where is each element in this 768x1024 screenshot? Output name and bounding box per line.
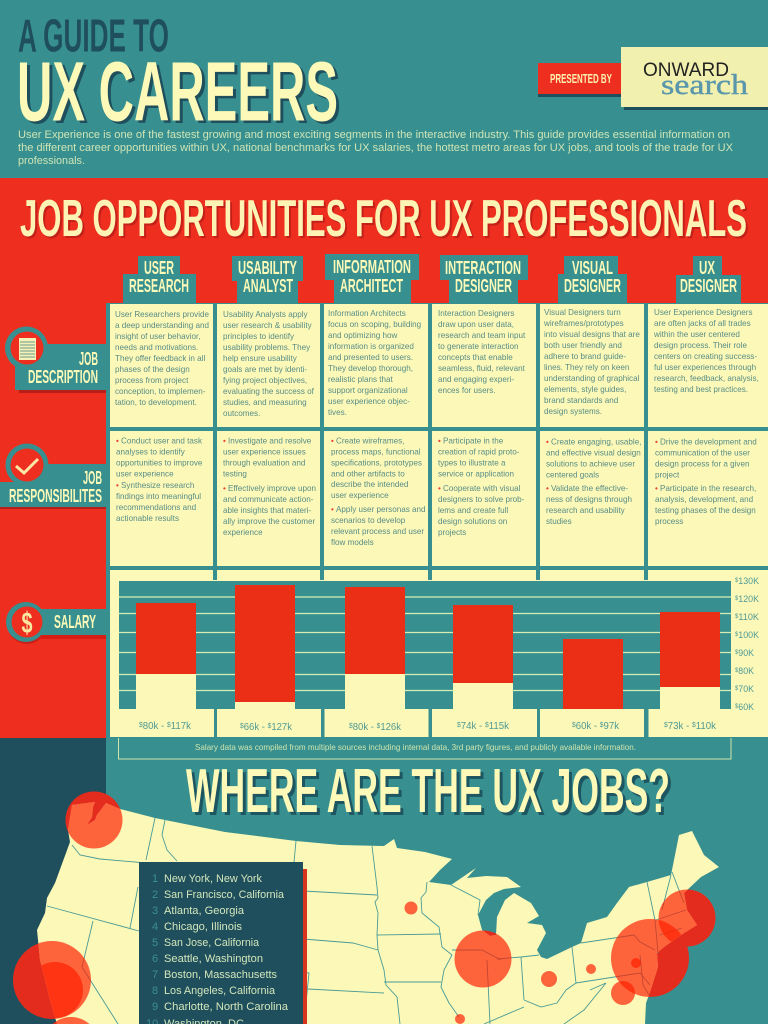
salary range cells: 115k	[489, 721, 510, 732]
column header: information architect: ARCHITECT	[340, 276, 403, 296]
description text: visual designer: brand standards and	[544, 396, 618, 405]
description text: user research: a deep understanding and	[115, 321, 209, 330]
responsibilities text: information architect: user experience	[331, 491, 389, 500]
description text: usability analyst: goals are met by identi-	[223, 365, 307, 374]
responsibilities text: usability analyst: Investigate and resolve	[228, 436, 312, 446]
responsibilities text: usability analyst: testing	[223, 470, 247, 478]
metro circles over land	[38, 802, 697, 1024]
salary range cells: $	[664, 722, 668, 729]
presented by ribbon	[538, 63, 628, 97]
job description row cells	[110, 304, 768, 427]
intro paragraph	[18, 129, 734, 167]
top metro areas list: Seattle, Washington	[164, 953, 263, 965]
salary axis labels: $	[735, 686, 739, 692]
responsibilities text: user research: findings into meaningful	[116, 492, 201, 501]
salary axis labels: 60K	[738, 702, 754, 712]
responsibilities text: user research: user experience	[116, 470, 174, 478]
responsibilities text: visual designer: Validate the effective-	[551, 484, 628, 493]
description text: information architect: realistic plans that	[328, 375, 394, 384]
salary axis labels: 120K	[738, 594, 759, 604]
description text: usability analyst: user research & usability	[223, 321, 313, 330]
description text: visual designer: design systems.	[544, 407, 602, 416]
icon: dollar sign: $	[22, 607, 33, 640]
responsibilities text: ux designer: testing phases of the design	[655, 506, 756, 515]
description text: visual designer: wireframes/prototypes	[543, 319, 624, 328]
description text: ux designer: are often jacks of all trades	[654, 319, 751, 328]
responsibilities text: usability analyst: through evaluation and	[223, 458, 305, 468]
responsibilities text: information architect: scenarios to develop	[331, 516, 406, 525]
responsibilities text: interaction designer: •	[438, 436, 441, 446]
responsibilities text: information architect: and other artifacts to	[331, 470, 405, 478]
top metro areas list: 1	[152, 873, 158, 885]
title line: ux careers: UX CAREERS	[20, 47, 341, 141]
description text: user research: phases of the design	[115, 365, 190, 374]
salary axis labels: 110K	[738, 612, 759, 622]
responsibilities text: usability analyst: •	[223, 436, 226, 446]
presented by ribbon: PRESENTED BY	[550, 72, 612, 86]
intro paragraph: User Experience is one of the fastest growing and most exciting segments in the interactive industry. This guide provides essential information on	[18, 129, 730, 141]
salary axis labels	[735, 576, 759, 712]
salary bar chart	[136, 585, 720, 709]
top metro areas list: Charlotte, North Carolina	[164, 1001, 289, 1013]
description text: user research: They offer feedback in all	[115, 354, 205, 363]
description text: information architect: focus on scoping, building	[328, 320, 421, 329]
description text: ux designer: ful user experiences through	[654, 363, 756, 372]
responsibilities text: interaction designer: creation of rapid proto-	[438, 448, 520, 456]
description text: visual designer: elements, style guides,	[544, 385, 626, 394]
salary range cells: 126k	[380, 722, 402, 733]
top metro areas list: 2	[152, 889, 158, 901]
side label: job description	[5, 326, 107, 393]
description text: visual designer: lines. They rely on keen	[544, 363, 629, 372]
responsibilities text: ux designer: design process for a given	[655, 460, 749, 468]
responsibilities text: usability analyst: able insights that materi-	[223, 506, 311, 515]
responsibilities text: interaction designer: lems and create full	[438, 506, 508, 515]
side label: salary	[6, 602, 106, 644]
salary axis labels: 80K	[738, 666, 754, 676]
red section background	[0, 178, 768, 738]
description text: usability analyst: Usability Analysts apply	[223, 310, 309, 319]
responsibilities text: visual designer: studies	[546, 517, 572, 526]
responsibilities text: information architect: Apply user personas and	[336, 505, 426, 514]
salary axis labels: $	[735, 578, 739, 584]
responsibilities text: interaction designer: Participate in the	[443, 436, 504, 446]
title line: ux careers	[17, 44, 341, 141]
salary range cells: 66k -	[244, 722, 268, 733]
top metro areas list: Chicago, Illinois	[164, 921, 242, 933]
column header: interaction designer	[440, 255, 528, 304]
icon: document	[19, 338, 36, 360]
responsibilities text: interaction designer: design solutions on	[438, 517, 507, 526]
responsibilities text: ux designer: project	[655, 470, 680, 480]
description text: user research: conception, to implemen-	[115, 387, 206, 396]
column header: visual designer: DESIGNER	[564, 276, 621, 296]
description text: visual designer: both user friendly and	[544, 341, 622, 350]
responsibilities text: information architect: •	[331, 505, 334, 514]
side label: job description: DESCRIPTION	[28, 367, 98, 387]
responsibilities text: user research: Conduct user and task	[121, 436, 203, 446]
top metro areas list: Atlanta, Georgia	[164, 905, 245, 917]
description text: interaction designer: seamless, fluid, relevant	[438, 364, 526, 373]
description text: usability analyst: usability problems. They	[223, 343, 311, 352]
column header: interaction designer: INTERACTION	[445, 258, 521, 278]
top metro areas list: New York, New York	[164, 873, 262, 885]
responsibilities text: user research: Synthesize research	[121, 481, 194, 490]
responsibilities text: ux designer: •	[655, 484, 658, 493]
salary range cells: 127k	[271, 722, 293, 733]
column header: information architect: INFORMATION	[333, 257, 411, 277]
description text: interaction designer: to generate interaction	[438, 342, 519, 351]
description text: visual designer: understanding of graphical	[544, 374, 640, 383]
responsibilities text: interaction designer: •	[438, 484, 441, 493]
salary range cells	[110, 709, 768, 737]
description text: usability analyst: principles to identify	[223, 332, 295, 341]
description text: interaction designer: Interaction Designers	[438, 309, 514, 318]
description text: interaction designer: and engaging experi-	[438, 375, 514, 384]
map land	[37, 802, 719, 1024]
salary axis labels: $	[735, 704, 739, 710]
responsibilities text: user research: •	[116, 436, 119, 446]
salary axis labels: $	[735, 632, 739, 638]
responsibilities text: interaction designer: types to illustrate a	[438, 458, 506, 468]
description text: usability analyst: evaluating the success of	[223, 387, 315, 396]
column header: user research: USER	[144, 258, 174, 278]
description text: ux designer: centers on creating success-	[654, 352, 757, 361]
column header: visual designer	[558, 256, 627, 304]
top metro areas list: 3	[152, 905, 158, 917]
salary range cells: $	[268, 723, 271, 730]
description text: ux designer: design process. Their role	[654, 341, 747, 350]
responsibilities text: information architect: describe the intended	[331, 480, 408, 489]
description text: visual designer: adhere to brand guide-	[544, 352, 626, 361]
responsibilities text: information architect: relevant process and user	[331, 527, 424, 536]
salary range cells: $	[600, 722, 604, 729]
side label: job responsibilities: RESPONSIBILITES	[9, 486, 102, 506]
description text: interaction designer: ences for users.	[438, 386, 496, 395]
responsibilities text: interaction designer: service or application	[438, 470, 514, 478]
responsibilities text: information architect: flow models	[331, 538, 374, 547]
description text: user research: needs and motivations.	[115, 343, 198, 352]
top metro areas list: 9	[152, 1001, 158, 1013]
responsibilities text: usability analyst: and communicate action-	[223, 495, 314, 504]
header	[17, 10, 768, 167]
salary range cells: $	[377, 723, 380, 730]
responsibilities text: ux designer: Drive the development and	[660, 438, 757, 446]
description text: information architect: Information Architects	[328, 309, 406, 318]
job responsibilities row cells	[110, 431, 768, 566]
description text: ux designer: testing and best practices.	[654, 385, 748, 394]
column header: usability analyst: USABILITY	[238, 258, 297, 278]
salary range cells: 110k	[696, 721, 717, 732]
description text: information architect: and presented to users.	[328, 353, 413, 362]
description text: interaction designer: draw upon user data,	[438, 320, 514, 329]
description text: information architect: support organizational	[328, 386, 408, 395]
responsibilities text: ux designer: Participate in the research,	[660, 484, 756, 493]
salary data note	[118, 738, 731, 759]
description text: usability analyst: help ensure usability	[223, 354, 298, 363]
description text: information architect: user experience objec-	[328, 397, 410, 406]
responsibilities text: interaction designer: projects	[438, 528, 466, 537]
column header: interaction designer: DESIGNER	[455, 276, 512, 296]
responsibilities text: visual designer: •	[546, 484, 549, 493]
salary axis labels: $	[735, 614, 739, 620]
column header: ux designer	[676, 256, 741, 304]
top metro areas list: 4	[152, 921, 158, 933]
description text: ux designer: research, feedback, analysis,	[654, 374, 759, 383]
description text: user research: User Researchers provide	[115, 310, 210, 319]
salary range cells: 80k -	[353, 722, 377, 733]
description text: visual designer: Visual Designers turn	[544, 308, 621, 317]
responsibilities text: usability analyst: •	[223, 484, 226, 493]
responsibilities text: visual designer: and effective visual design	[546, 448, 641, 458]
responsibilities text: usability analyst: Effectively improve upon	[228, 484, 316, 493]
description text: visual designer: into visual designs that are	[544, 330, 640, 339]
side label: job responsibilities: JOB	[83, 468, 102, 488]
column header: user research: RESEARCH	[129, 276, 189, 296]
side label: job responsibilities	[0, 444, 107, 509]
title line: a guide to: A GUIDE TO	[18, 10, 169, 62]
column header: usability analyst	[232, 256, 303, 304]
responsibilities text: information architect: •	[331, 436, 334, 446]
responsibilities text: information architect: Create wireframes,	[336, 436, 404, 446]
top metro areas list: 7	[152, 969, 158, 981]
top metro areas list: San Francisco, California	[164, 889, 285, 901]
salary range cells: $	[692, 722, 696, 729]
column header: visual designer: VISUAL	[572, 258, 613, 278]
description text: usability analyst: studies, and measuring	[223, 398, 307, 407]
state borders	[47, 818, 686, 1024]
description text: usability analyst: outcomes.	[223, 409, 260, 418]
top metro areas list	[139, 862, 307, 1024]
table background	[106, 303, 768, 738]
description text: user research: process from project	[115, 376, 189, 385]
description text: interaction designer: research and team input	[438, 331, 526, 340]
salary axis labels: 100K	[738, 630, 759, 640]
salary axis labels: $	[735, 668, 739, 674]
column header: user research	[123, 256, 196, 304]
responsibilities text: visual designer: Create engaging, usable,	[551, 438, 641, 446]
salary range cells: $	[167, 722, 171, 729]
top metro areas list: Boston, Massachusetts	[164, 969, 277, 981]
responsibilities text: interaction designer: Cooperate with visual	[443, 484, 521, 493]
salary axis labels: 90K	[738, 648, 754, 658]
icon: check mark	[16, 459, 38, 473]
description text: user research: insight of user behavior,	[115, 332, 200, 341]
salary axis labels: $	[735, 596, 739, 602]
description text: interaction designer: concepts that enable	[438, 353, 513, 362]
responsibilities text: ux designer: process	[655, 517, 683, 526]
column header: ux designer: UX	[699, 258, 715, 278]
top metro areas list: Los Angeles, California	[164, 985, 276, 997]
responsibilities text: visual designer: •	[546, 438, 549, 446]
salary range cells: 97k	[604, 721, 620, 732]
responsibilities text: interaction designer: designers to solve prob-	[438, 495, 525, 504]
description text: ux designer: User Experience Designers	[654, 308, 753, 317]
column header: information architect	[325, 254, 419, 304]
responsibilities text: information architect: specifications, prototypes	[331, 458, 422, 468]
onward search logo: search	[661, 70, 748, 101]
responsibilities text: visual designer: solutions to achieve user	[546, 460, 635, 468]
description text: information architect: information is organized	[328, 342, 414, 351]
intro paragraph: the different career opportunities within UX, national benchmarks for UX salaries, the hottest metro areas for UX jobs, and tools of the trade for UX	[18, 142, 734, 154]
responsibilities text: ux designer: •	[655, 438, 658, 446]
onward search logo: ONWARD	[643, 60, 729, 81]
salary data note: Salary data was compiled from multiple sources including internal data, 3rd party figures, and publicly available information.	[195, 742, 636, 752]
responsibilities text: user research: actionable results	[116, 514, 179, 523]
description text: information architect: They develop thorough,	[328, 364, 413, 373]
salary range cells: 60k -	[576, 721, 600, 732]
salary axis labels: $	[735, 650, 739, 656]
responsibilities text: usability analyst: user experience issues	[223, 448, 306, 456]
description text: information architect: and optimizing how	[328, 331, 397, 340]
description text: user research: tation, to development.	[115, 398, 197, 407]
salary range cells: 74k -	[461, 721, 485, 732]
metro circles over water	[13, 792, 716, 1024]
chart grid lines	[119, 597, 731, 690]
description text: ux designer: within the user centered	[653, 330, 740, 339]
salary axis labels: 130K	[738, 576, 759, 586]
salary range cells: 73k -	[668, 721, 692, 732]
salary chart panel background	[110, 570, 768, 709]
top metro areas list: 5	[152, 937, 158, 949]
responsibilities text: visual designer: ness of designs through	[546, 495, 632, 504]
responsibilities text: ux designer: communication of the user	[655, 448, 750, 458]
top metro areas list: San Jose, California	[164, 937, 260, 949]
description text: information architect: tives.	[328, 408, 347, 417]
top metro areas list: 8	[152, 985, 158, 997]
dark left column	[0, 738, 106, 1024]
salary range cells: $	[457, 722, 461, 729]
salary range cells: 117k	[171, 721, 192, 732]
side label: salary: SALARY	[54, 612, 96, 632]
salary range cells: $	[349, 723, 353, 730]
responsibilities text: ux designer: analysis, development, and	[655, 495, 753, 504]
top metro areas list: 6	[152, 953, 158, 965]
salary range cells: $	[572, 722, 576, 729]
responsibilities text: information architect: process maps, functional	[331, 448, 421, 456]
responsibilities text: user research: analyses to identify	[116, 448, 186, 456]
salary range cells: $	[139, 722, 143, 729]
description text: usability analyst: fying project objectives,	[223, 376, 307, 385]
responsibilities text: usability analyst: experience	[223, 528, 263, 537]
map of the united states	[13, 792, 719, 1024]
side label: job description: JOB	[79, 349, 98, 369]
title line: ux careers: UX CAREERS	[17, 44, 338, 138]
responsibilities text: usability analyst: ally improve the customer	[223, 517, 316, 526]
intro paragraph: professionals.	[18, 155, 85, 167]
salary range cells: $	[240, 723, 244, 730]
responsibilities text: user research: opportunities to improve	[116, 458, 203, 468]
onward search logo	[621, 47, 768, 110]
column header: usability analyst: ANALYST	[243, 276, 293, 296]
salary range cells: $	[485, 722, 489, 729]
salary axis labels: 70K	[738, 684, 754, 694]
responsibilities text: user research: •	[116, 481, 119, 490]
responsibilities text: visual designer: centered goals	[546, 470, 599, 480]
salary range cells: 80k -	[143, 721, 167, 732]
responsibilities text: user research: recommendations and	[116, 503, 196, 512]
responsibilities text: visual designer: research and usability	[546, 506, 626, 515]
